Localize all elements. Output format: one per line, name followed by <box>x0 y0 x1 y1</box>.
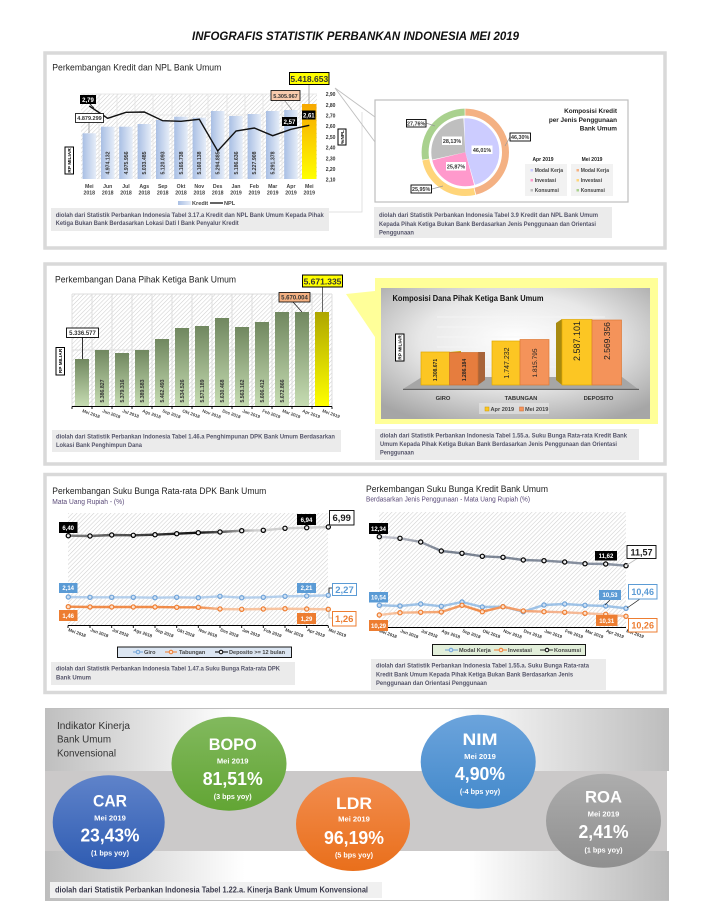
legend Mei 2019 <box>571 157 613 196</box>
month axis labels: 2019 <box>267 190 279 196</box>
month labels kredit rates: Nov 2018 <box>503 628 523 640</box>
month labels DPK rates <box>68 627 347 639</box>
month axis labels: 2018 <box>84 190 95 196</box>
legend kredit rates: Investasi <box>508 648 532 654</box>
3D bar chart: 2.569.356 <box>602 322 612 360</box>
month labels DPK rates: Okt 2018 <box>176 627 196 638</box>
subheading DPK: Mata Uang Rupiah - (%) <box>52 499 124 506</box>
label: RP Miliar <box>65 147 74 174</box>
bar chart: DPK: 5.571.189 <box>200 379 206 403</box>
indicator: LDR: 96,19% <box>324 828 384 848</box>
month labels DPK rates: Mei 2018 <box>68 627 87 638</box>
caption komposisi kredit: diolah dari Statistik Perbankan Indonesia Tabel 3.9 Kredit dan NPL Bank Umum <box>379 212 598 219</box>
month axis labels: 2018 <box>194 190 205 196</box>
caption komposisi DPK: diolah dari Statistik Perbankan Indonesia Tabel 1.55.a. Suku Bunga Rata-rata Kredit Bank <box>380 432 627 440</box>
DPK month labels: Mar 2019 <box>282 408 302 420</box>
bar chart: kredit: 5.294.885 <box>216 151 222 175</box>
callouts DPK: 5.670.004 <box>281 296 309 302</box>
callouts DPK rates: 2,21 <box>301 586 313 592</box>
label: %NPL <box>338 129 346 145</box>
NPL axis labels: 2,40 <box>326 146 336 152</box>
heading indikator: Indikator Kinerja <box>57 721 130 732</box>
line chart: suku bunga DPK <box>68 513 328 628</box>
indicator: NIM <box>421 715 536 809</box>
month axis labels: Jun <box>103 184 112 190</box>
caption kredit: diolah dari Statistik Perbankan Indonesia Tabel 3.17.a Kredit dan NPL Bank Umum Kepada Pihak <box>56 212 324 219</box>
indicator: BOPO <box>172 717 286 811</box>
bar chart: kredit: 5.033.485 <box>142 151 148 175</box>
bar chart: DPK: 5.379.316 <box>120 379 126 403</box>
3D bar chart <box>403 317 639 389</box>
legend Apr 2019 <box>525 157 567 196</box>
bar chart: DPK <box>72 294 332 409</box>
heading komposisi DPK: Komposisi Dana Pihak Ketiga Bank Umum <box>392 294 544 303</box>
NPL axis labels: 2,30 <box>326 156 336 162</box>
month axis labels: 2019 <box>285 190 297 196</box>
label: RP Miliar komposisi: RP MILIAR <box>398 335 404 360</box>
DPK month labels: Mei 2019 <box>322 408 341 419</box>
NPL axis labels: 2,70 <box>326 114 336 120</box>
3D bar chart: 1.286.184 <box>462 359 468 381</box>
caption komposisi kredit: Kepada Pihak Ketiga Bukan Bank Berdasarkan Jenis Penggunaan dan Orientasi <box>379 221 596 228</box>
heading komposisi: Komposisi Kredit <box>564 108 618 115</box>
callouts DPK rates: 6,40 <box>62 526 75 532</box>
heading suku bunga kredit: Perkembangan Suku Bunga Kredit Bank Umum <box>366 484 548 495</box>
legend Apr 2019: Modal Kerja <box>535 168 563 174</box>
indicator: LDR <box>296 777 410 871</box>
month labels DPK rates: Ags 2018 <box>133 627 153 639</box>
callouts kredit rates: 10,31 <box>599 619 615 625</box>
callouts kredit: 5.418.653 <box>290 74 328 84</box>
callouts kredit rates: 11,57 <box>630 548 653 558</box>
DPK month labels: Apr 2019 <box>302 408 321 419</box>
callouts kredit rates: 10,54 <box>371 596 387 602</box>
month axis labels: 2018 <box>175 190 187 196</box>
indicator: CAR: CAR <box>93 792 127 811</box>
month axis labels <box>84 184 315 196</box>
subheading kredit: Berdasarkan Jenis Penggunaan - Mata Uang Rupiah (%) <box>366 497 530 504</box>
month axis labels: 2018 <box>139 190 150 196</box>
month labels DPK rates: Mei 2019 <box>328 627 347 638</box>
donut labels <box>406 120 530 193</box>
panel: dana pihak ketiga <box>45 264 665 464</box>
category labels: TABUNGAN <box>505 396 537 402</box>
NPL axis labels: 2,60 <box>326 124 336 130</box>
indicator: CAR: 23,43% <box>80 826 140 846</box>
month axis labels: Okt <box>177 184 186 190</box>
indicator: LDR: (5 bps yoy) <box>335 850 374 859</box>
legend kredit rates <box>432 644 586 656</box>
month axis labels: Des <box>213 184 223 190</box>
month labels kredit rates: Jun 2018 <box>400 628 420 640</box>
legend DPK rates: Giro <box>144 650 156 656</box>
month axis labels: Sep <box>158 184 167 190</box>
heading indikator: Bank Umum <box>57 735 111 746</box>
caption DPK: Lokasi Bank Penghimpun Dana <box>56 442 142 449</box>
NPL axis labels: 2,50 <box>326 135 336 141</box>
label: RP Miliar DPK: RP MILIAR <box>58 348 64 373</box>
callouts kredit rates: 10,46 <box>631 587 654 597</box>
bar chart: kredit: 4.974.132 <box>106 151 112 175</box>
legend komposisi DPK <box>479 403 549 414</box>
NPL axis labels: 2,20 <box>326 167 336 173</box>
callouts DPK: 5.336.577 <box>69 331 97 337</box>
caption DPK rates: Bank Umum <box>56 674 91 681</box>
indicator: NIM: (-4 bps yoy) <box>460 787 501 796</box>
month labels kredit rates: Mar 2019 <box>585 628 605 640</box>
month labels kredit rates: Feb 2019 <box>564 628 584 640</box>
legend kredit rates: Konsumsi <box>554 648 581 654</box>
NPL axis labels <box>326 92 336 184</box>
month labels kredit rates <box>379 628 645 640</box>
indicator: ROA: Mei 2019 <box>588 810 619 819</box>
caption komposisi kredit <box>374 207 612 238</box>
DPK month labels: Des 2018 <box>222 408 242 420</box>
callouts kredit rates: 11,62 <box>599 554 614 560</box>
callouts DPK rates: 1,26 <box>335 614 353 625</box>
caption kredit rates: Kredit Bank Umum Kepada Pihak Ketiga Bukan Bank Berdasarkan Jenis <box>376 672 573 679</box>
line chart: suku bunga kredit <box>379 512 626 628</box>
legend Mei 2019: Investasi <box>581 178 603 184</box>
DPK month labels: Ags 2018 <box>142 408 162 420</box>
legend Mei 2019: Konsumsi <box>581 188 605 194</box>
indicator: NIM: Mei 2019 <box>464 752 496 761</box>
callouts kredit: 2,79 <box>82 98 94 104</box>
title: INFOGRAFIS STATISTIK PERBANKAN INDONESIA MEI 2019 <box>192 29 519 43</box>
DPK month labels: Feb 2019 <box>262 408 282 420</box>
legend: Kredit <box>192 201 208 207</box>
bar chart: kredit <box>81 94 317 179</box>
indicator: BOPO: BOPO <box>209 735 257 754</box>
callouts kredit rates <box>369 523 657 632</box>
3D bar chart: 2.587.101 <box>572 321 582 361</box>
3D bar chart: 1.815.795 <box>532 348 539 377</box>
bar chart: DPK: 5.606.412 <box>260 379 266 403</box>
bar chart: DPK: 5.534.526 <box>180 379 186 403</box>
category labels: DEPOSITO <box>584 396 614 402</box>
legend DPK rates: Deposito >= 12 bulan <box>229 650 286 656</box>
bar chart: kredit: 5.227.908 <box>252 151 258 175</box>
month labels DPK rates: Apr 2019 <box>306 627 326 638</box>
caption komposisi kredit: Penggunaan <box>379 230 414 237</box>
DPK month labels: Jul 2018 <box>122 408 140 419</box>
month labels kredit rates: Sep 2018 <box>462 628 482 640</box>
DPK month labels <box>82 408 341 420</box>
month labels DPK rates: Sep 2018 <box>155 627 175 639</box>
bar chart: DPK: 5.386.827 <box>100 379 106 403</box>
month axis labels: 2018 <box>120 190 132 196</box>
donut labels: 46,30% <box>511 135 530 141</box>
month axis labels: Mar <box>268 184 277 190</box>
indicator: CAR: Mei 2019 <box>94 814 126 823</box>
legend Apr 2019: Konsumsi <box>535 188 559 194</box>
indicator: ROA <box>546 774 661 868</box>
bar chart: kredit: 5.120.093 <box>160 151 166 175</box>
bar chart: kredit: 4.975.956 <box>124 151 130 175</box>
month labels DPK rates: Jan 2019 <box>241 627 261 638</box>
caption DPK rates: diolah dari Statistik Perbankan Indonesia Tabel 1.47.a Suku Bunga Rata-rata DPK <box>56 666 280 673</box>
heading DPK: Perkembangan Dana Pihak Ketiga Bank Umum <box>55 274 236 285</box>
callouts DPK rates <box>59 510 356 626</box>
DPK month labels: Mei 2018 <box>82 408 101 419</box>
month axis labels: Nov <box>194 184 204 190</box>
label: RP Miliar: RP MILIAR <box>67 148 73 173</box>
month labels DPK rates: Jun 2018 <box>90 627 110 639</box>
donut chart <box>425 112 506 193</box>
indicator: BOPO: Mei 2019 <box>217 756 249 765</box>
category labels: GIRO <box>436 396 451 402</box>
callouts DPK <box>66 275 342 359</box>
donut labels: 27,76% <box>407 121 426 127</box>
month labels kredit rates: Mei 2018 <box>379 628 398 639</box>
legend Apr 2019: Investasi <box>535 178 557 184</box>
month labels DPK rates: Nov 2018 <box>198 627 218 639</box>
month axis labels: Ags <box>139 184 149 190</box>
callouts kredit rates: 10,26 <box>631 621 654 631</box>
bar chart: DPK: 5.563.162 <box>240 379 246 403</box>
caption indikator: diolah dari Statistik Perbankan Indonesia Tabel 1.22.a. Kinerja Bank Umum Konvensional <box>55 886 368 895</box>
month labels kredit rates: Mei 2019 <box>626 628 645 639</box>
month labels kredit rates: Jan 2019 <box>544 628 563 639</box>
caption DPK <box>52 430 341 452</box>
month labels kredit rates: Jul 2018 <box>420 628 439 639</box>
bar chart: DPK: 5.672.866 <box>280 379 286 403</box>
month axis labels: 2018 <box>157 190 169 196</box>
callouts kredit: 2,57 <box>284 120 296 126</box>
indicator: CAR: (1 bps yoy) <box>91 849 130 858</box>
callouts kredit rates: 10,53 <box>602 593 618 599</box>
bar chart: DPK: 5.389.583 <box>140 379 146 403</box>
callouts kredit: 4.879.299 <box>77 116 102 122</box>
legend DPK rates: Tabungan <box>179 650 206 656</box>
bar chart: kredit: 5.291.378 <box>270 151 276 175</box>
panel: suku bunga <box>45 474 665 692</box>
DPK month labels: Sep 2018 <box>162 408 182 420</box>
NPL axis labels: 2,80 <box>326 103 336 109</box>
caption komposisi DPK: Penggunaan <box>380 450 414 456</box>
month labels kredit rates: Des 2018 <box>523 628 543 640</box>
month axis labels: 2018 <box>212 190 224 196</box>
bar chart: kredit: 5.186.636 <box>234 151 240 175</box>
callouts DPK: 5.671.335 <box>304 276 342 286</box>
bar chart: DPK: 5.462.493 <box>160 379 166 403</box>
callouts DPK rates: 2,14 <box>62 586 75 592</box>
legend <box>178 201 236 207</box>
panel: kredit dan NPL <box>45 53 665 248</box>
legend Mei 2019: Modal Kerja <box>581 168 609 174</box>
month labels DPK rates: Mar 2019 <box>285 627 305 639</box>
label: RP Miliar DPK <box>56 348 64 375</box>
legend Mei 2019: Mei 2019 <box>582 157 603 163</box>
callouts kredit: 5.305.967 <box>273 94 298 100</box>
3D bar chart: 1.308.671 <box>433 359 439 381</box>
DPK month labels: Jan 2019 <box>242 408 261 419</box>
caption kredit <box>51 208 329 231</box>
caption kredit rates <box>371 659 606 690</box>
NPL axis labels: 2,90 <box>326 92 336 98</box>
caption komposisi DPK <box>375 429 639 460</box>
month axis labels: Jan <box>232 184 240 190</box>
line chart: NPL <box>89 106 309 151</box>
heading komposisi: per Jenis Penggunaan <box>549 117 617 124</box>
donut labels: 28,13% <box>443 139 461 145</box>
caption DPK rates <box>51 662 295 685</box>
panel: komposisi kredit <box>375 100 628 202</box>
caption indikator <box>50 882 382 898</box>
NPL axis labels: 2,10 <box>326 178 336 184</box>
DPK month labels: Nov 2018 <box>202 408 222 420</box>
DPK month labels: Okt 2018 <box>182 408 201 419</box>
DPK month labels: Jun 2018 <box>102 408 122 420</box>
caption kredit: Ketiga Bukan Bank Berdasarkan Lokasi Dati I Bank Penyalur Kredit <box>56 220 239 227</box>
heading indikator <box>57 721 130 760</box>
month axis labels: 2019 <box>249 190 260 196</box>
heading indikator: Konvensional <box>57 749 116 760</box>
month axis labels: Mei <box>85 184 94 190</box>
callouts kredit rates: 12,34 <box>371 527 387 533</box>
caption komposisi DPK: Umum Kepada Pihak Ketiga Bukan Bank Berdasarkan Jenis Penggunaan dan Orientasi <box>380 441 617 448</box>
indicator: CAR <box>53 775 165 869</box>
month axis labels: 2019 <box>230 190 242 196</box>
bar chart: kredit: 5.160.138 <box>197 151 203 175</box>
indicator: BOPO: (3 bps yoy) <box>214 792 252 801</box>
indicator: NIM: 4,90% <box>455 764 505 784</box>
month labels kredit rates: Ags 2018 <box>441 628 461 640</box>
label: %NPL: %NPL <box>340 130 346 144</box>
callouts DPK rates: 1,46 <box>62 614 75 620</box>
caption DPK: diolah dari Statistik Perbankan Indonesia Tabel 1.46.a Penghimpunan DPK Bank Umum Berdasarkan <box>56 434 335 440</box>
legend: NPL <box>224 201 236 207</box>
heading suku bunga DPK: Perkembangan Suku Bunga Rata-rata DPK Bank Umum <box>52 486 266 497</box>
month axis labels: 2018 <box>102 190 114 196</box>
caption kredit rates: Penggunaan dan Orientasi Penggunaan <box>376 680 487 687</box>
bar chart: kredit: 5.165.738 <box>179 151 185 175</box>
legend Apr 2019: Apr 2019 <box>532 157 554 163</box>
legend kredit rates: Modal Kerja <box>459 648 492 654</box>
callouts DPK rates: 2,27 <box>335 585 354 596</box>
callouts kredit <box>76 72 329 133</box>
pointer lines <box>335 88 375 142</box>
month labels kredit rates: Apr 2019 <box>605 628 625 639</box>
donut labels: 46,01% <box>473 148 491 154</box>
callouts DPK rates: 6,94 <box>301 518 313 524</box>
month axis labels: 2019 <box>304 190 315 196</box>
legend DPK rates <box>118 647 292 658</box>
callouts kredit: 2,61 <box>303 114 315 120</box>
legend komposisi DPK: Mei 2019 <box>525 407 548 413</box>
panel: indikator kinerja <box>45 708 669 900</box>
label: RP Miliar komposisi <box>396 334 404 361</box>
heading komposisi <box>549 108 618 132</box>
category labels <box>436 396 614 402</box>
month labels kredit rates: Okt 2018 <box>482 628 501 639</box>
indicator: ROA: (1 bps yoy) <box>585 845 623 854</box>
month labels DPK rates: Jul 2018 <box>111 627 130 638</box>
donut labels: 25,87% <box>447 164 465 170</box>
indicator: LDR: Mei 2019 <box>338 815 370 824</box>
month labels DPK rates: Des 2018 <box>220 627 240 639</box>
callouts DPK rates: 1,29 <box>301 617 313 623</box>
indicator: ROA: ROA <box>585 788 622 807</box>
heading: kredit dan NPL: Perkembangan Kredit dan NPL Bank Umum <box>52 62 221 74</box>
month axis labels: Feb <box>250 184 259 190</box>
month axis labels: Jul <box>122 184 130 190</box>
3D bar chart: 1.747.232 <box>504 347 511 379</box>
heading komposisi: Bank Umum <box>580 126 617 132</box>
indicator: BOPO: 81,51% <box>203 769 263 789</box>
callouts kredit rates: 10,29 <box>371 624 387 630</box>
month labels DPK rates: Feb 2019 <box>263 627 283 639</box>
donut labels: 25,95% <box>412 187 431 193</box>
indicator: NIM: NIM <box>462 730 498 749</box>
panel: komposisi DPK <box>346 278 658 424</box>
month axis labels: Apr <box>287 184 295 190</box>
caption kredit rates: diolah dari Statistik Perbankan Indonesia Tabel 1.55.a. Suku Bunga Rata-rata <box>376 663 589 670</box>
indicator: ROA: 2,41% <box>578 822 628 842</box>
callouts DPK rates: 6,99 <box>332 513 351 524</box>
indicator: LDR: LDR <box>336 794 372 813</box>
month axis labels: Mei <box>305 184 314 190</box>
legend komposisi DPK: Apr 2019 <box>490 407 514 413</box>
bar chart: DPK: 5.630.468 <box>220 379 226 403</box>
